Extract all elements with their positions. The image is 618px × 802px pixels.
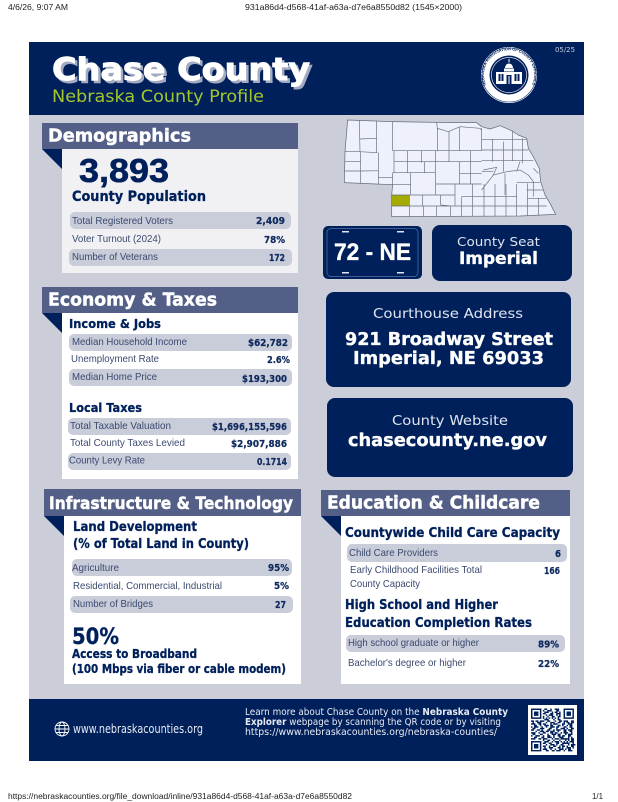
row: residential: 5%: [274, 581, 289, 592]
row: home price: [69, 369, 292, 386]
stat: broadband access: 50%: [72, 625, 119, 650]
subheading: child care capacity: Countywide Child Care Capacity: [345, 526, 560, 541]
row: agriculture: 95%: [268, 563, 289, 574]
stat: broadband access: Access to Broadband: [72, 647, 197, 661]
callout: county website: County Website: [392, 414, 508, 429]
row: levy rate: County Levy Rate: [69, 454, 145, 466]
row: taxable valuation: [68, 418, 291, 435]
callout: courthouse address: Courthouse Address: [373, 307, 523, 322]
heading: economy and taxes: Economy & Taxes: [48, 290, 217, 310]
row: child care providers: 6: [555, 549, 561, 560]
footer note: Learn more about Chase County on the Nebraska County: [245, 707, 508, 718]
callout: courthouse address: 921 Broadway Street: [345, 329, 553, 350]
row: early childhood capacity: 166: [544, 566, 560, 577]
row: early childhood capacity: County Capacity: [350, 578, 421, 590]
header band: [29, 42, 584, 115]
print header: [8, 3, 462, 12]
row: registered voters: [70, 212, 291, 229]
row: early childhood capacity: Early Childhood Facilities Total: [350, 564, 482, 576]
row: high school: [346, 635, 565, 652]
row: levy rate: [68, 453, 291, 470]
row: taxable valuation: $1,696,155,596: [212, 422, 287, 433]
subheading: land development: [73, 520, 249, 552]
row: bridges: [70, 596, 293, 613]
footer band: [29, 699, 584, 761]
row: household income: $62,782: [248, 338, 288, 349]
footer note: Explorer webpage by scanning the QR code or by visiting: [245, 717, 501, 728]
row: bachelor's: 22%: [538, 659, 559, 670]
row: bridges: Number of Bridges: [73, 598, 153, 610]
row: home price: Median Home Price: [72, 371, 157, 383]
subheading: completion rates: High School and Higher: [345, 598, 499, 613]
subtitle: Nebraska County Profile: [52, 87, 264, 107]
print footer: https://nebraskacounties.org/file_download/inline/931a86d4-d568-41af-a63a-d7e6a8550d82: [8, 792, 353, 801]
stat: broadband access: (100 Mbps via fiber or cable modem): [72, 662, 286, 676]
heading: infrastructure and technology: [44, 489, 301, 536]
heading: infrastructure and technology: Infrastructure & Technology: [49, 494, 293, 514]
row: child care providers: Child Care Providers: [349, 547, 438, 559]
heading: demographics: Demographics: [48, 126, 191, 146]
stat: broadband access: [72, 625, 286, 676]
footer note: https://www.nebraskacounties.org/nebraska-counties/: [245, 727, 498, 738]
subheading: completion rates: Education Completion Rates: [345, 616, 532, 631]
row: taxes levied: $2,907,886: [231, 439, 287, 450]
subheading: completion rates: [345, 598, 532, 631]
row: household income: [69, 334, 292, 351]
subheading: local taxes: Local Taxes: [69, 400, 142, 415]
row: unemployment: Unemployment Rate: [71, 353, 159, 365]
row: high school: 89%: [538, 640, 559, 650]
row: bachelor's: Bachelor's degree or higher: [348, 657, 466, 669]
heading: education and childcare: Education & Childcare: [327, 492, 540, 514]
row: veterans: [69, 249, 292, 266]
subheading: land development: (% of Total Land in County): [73, 537, 249, 552]
row: agriculture: [72, 559, 292, 576]
panel: demographics: [42, 123, 298, 273]
row: home price: $193,300: [242, 374, 287, 385]
row: high school: High school graduate or higher: [348, 637, 479, 649]
print header: 931a86d4-d568-41af-a63a-d7e6a8550d82 (1545×2000): [245, 3, 462, 12]
stat: county population: 3,893: [79, 152, 169, 189]
icon: QR code: [528, 705, 577, 755]
panel: infrastructure and technology: [44, 489, 301, 684]
panel: economy and taxes: [42, 287, 298, 479]
icon: association seal: [481, 47, 537, 103]
print header: 4/6/26, 9:07 AM: [8, 3, 68, 12]
row: voter turnout: Voter Turnout (2024): [72, 233, 161, 245]
heading: economy and taxes: [42, 287, 298, 333]
row: veterans: Number of Veterans: [72, 251, 158, 263]
callout: county seat: [432, 225, 572, 281]
row: taxable valuation: Total Taxable Valuation: [70, 420, 171, 432]
icon: globe: [55, 722, 69, 736]
heading: education and childcare: [321, 490, 570, 536]
row: child care providers: [347, 544, 567, 562]
row: registered voters: Total Registered Voters: [72, 215, 173, 227]
row: veterans: 172: [269, 253, 285, 264]
license plate: 72 - NE: [323, 226, 422, 279]
stat: county population: County Population: [72, 189, 206, 205]
license plate: 72 - NE: 72 - NE: [334, 239, 411, 266]
callout: county seat: County Seat: [457, 235, 540, 249]
title: Chase County: [54, 54, 312, 90]
callout: county seat: Imperial: [459, 249, 538, 268]
row: household income: Median Household Income: [72, 336, 187, 348]
date stamp: 05/25: [555, 46, 575, 54]
panel: education and childcare: [321, 490, 570, 684]
row: residential: Residential, Commercial, Industrial: [73, 580, 222, 592]
subheading: income and jobs: Income & Jobs: [69, 316, 161, 331]
row: unemployment: [71, 353, 290, 366]
row: bachelor's: [348, 657, 559, 670]
print footer: 1/1: [592, 792, 604, 801]
subheading: land development: Land Development: [73, 520, 197, 535]
row: unemployment: 2.6%: [267, 355, 290, 366]
row: levy rate: 0.1714: [257, 457, 287, 468]
heading: demographics: [42, 123, 298, 169]
title: Chase County: [52, 52, 310, 88]
row: agriculture: Agriculture: [72, 562, 119, 574]
callout: county website: [327, 398, 573, 477]
map: Nebraska counties: [344, 120, 556, 217]
callout: county website: chasecounty.ne.gov: [348, 430, 547, 451]
footer note: [245, 707, 508, 738]
row: bridges: 27: [275, 600, 286, 611]
print footer: [8, 792, 604, 801]
row: early childhood capacity: [350, 564, 560, 590]
callout: courthouse address: Imperial, NE 69033: [353, 348, 544, 369]
row: voter turnout: 78%: [264, 235, 285, 246]
row: voter turnout: [72, 233, 285, 246]
icon: association seal: NEBRASKA ASSOCIATION OF COUNTY OFFICIALS: [481, 47, 537, 86]
website link: www.nebraskacounties.org: [73, 722, 203, 736]
stat: county population: [72, 152, 206, 205]
callout: courthouse address: [326, 292, 571, 387]
row: taxes levied: [70, 437, 287, 450]
row: registered voters: 2,409: [256, 216, 285, 227]
row: taxes levied: Total County Taxes Levied: [70, 437, 185, 449]
